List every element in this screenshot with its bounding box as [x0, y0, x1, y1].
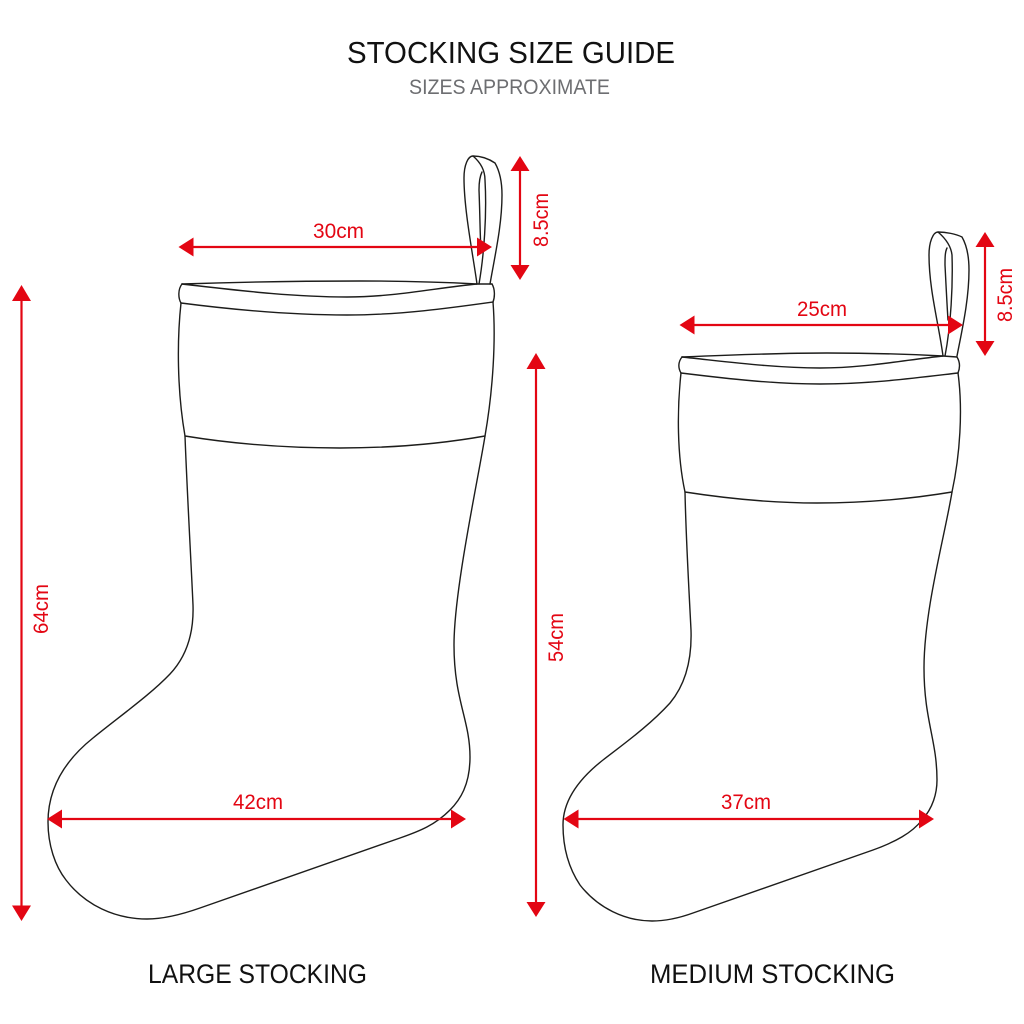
- label: 54cm: 54cm: [545, 613, 568, 662]
- arrow: medium loop height 8.5cm: [976, 232, 994, 356]
- large stocking outline: [48, 156, 502, 919]
- caption: medium stocking: MEDIUM STOCKING: [650, 959, 895, 989]
- subtitle: SIZES APPROXIMATE: [409, 76, 610, 99]
- label: 37cm: 37cm: [721, 791, 771, 814]
- label: 30cm: 30cm: [313, 220, 364, 243]
- arrow: large foot width 42cm: [47, 810, 466, 828]
- label: medium loop 8.5cm: 8.5cm: [994, 268, 1017, 322]
- arrow: large loop height 8.5cm: [510, 156, 530, 280]
- label: 64cm: 64cm: [30, 584, 53, 634]
- caption: large stocking: LARGE STOCKING: [148, 959, 367, 989]
- arrow: medium height 54cm: [526, 353, 546, 917]
- label: large loop 8.5cm: 8.5cm: [530, 193, 553, 247]
- title: STOCKING SIZE GUIDE: [347, 35, 675, 70]
- arrow: large height 64cm: [12, 285, 31, 921]
- medium stocking outline: [563, 232, 969, 921]
- arrow: medium foot width 37cm: [564, 810, 934, 828]
- label: 25cm: 25cm: [797, 298, 847, 321]
- label: 42cm: 42cm: [233, 791, 283, 814]
- arrow: large opening width 30cm: [178, 238, 492, 256]
- arrow: medium opening width 25cm: [680, 316, 963, 334]
